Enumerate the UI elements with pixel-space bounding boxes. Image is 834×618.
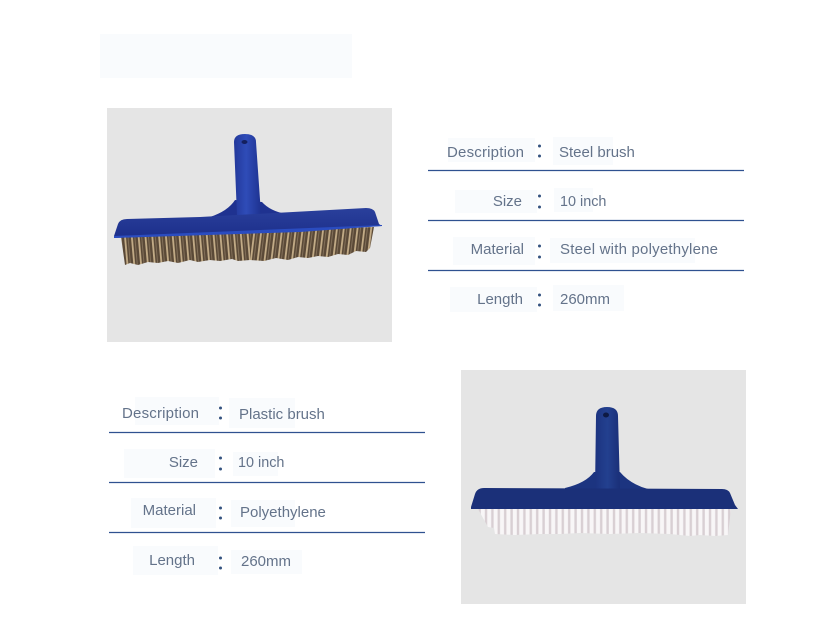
icon: plastic brush handle — [595, 407, 620, 491]
row: plastic size: 10 inch — [238, 455, 284, 471]
row: steel description: Description — [447, 144, 524, 161]
icon: steel bristles — [121, 227, 374, 265]
row: steel size: Size — [493, 193, 522, 210]
table: steel brush specs — [428, 137, 744, 312]
row: steel length — [450, 285, 624, 312]
icon: steel brush flanges — [210, 200, 286, 222]
row: steel size: 10 inch — [560, 194, 606, 210]
row: plastic length: Length — [149, 552, 195, 569]
panel: steel brush photo — [107, 108, 392, 342]
icon: plastic brush head — [471, 488, 738, 509]
row: plastic size: Size — [169, 454, 198, 471]
row: plastic material: Polyethylene — [240, 504, 326, 521]
icon: plastic brush flanges — [565, 472, 648, 492]
panel: plastic brush photo — [461, 370, 746, 604]
row: plastic length: 260mm — [241, 553, 291, 570]
blank header banner — [100, 34, 352, 78]
row: plastic material — [131, 498, 326, 528]
row: steel description — [447, 137, 635, 165]
icon: plastic bristles — [478, 509, 731, 536]
row: plastic material: Material — [143, 502, 196, 519]
row: plastic description: Plastic brush — [239, 406, 325, 423]
row: steel material — [453, 237, 718, 265]
table: plastic brush specs — [109, 397, 425, 575]
row: plastic description: Description — [122, 405, 199, 422]
row: steel material: Steel with polyethylene — [560, 241, 718, 258]
row: steel size — [455, 188, 606, 213]
row: steel material: Material — [471, 241, 524, 258]
icon: steel brush head — [114, 208, 382, 238]
row: plastic size — [124, 449, 284, 478]
row: steel description: Steel brush — [559, 144, 635, 161]
icon: steel brush handle — [234, 134, 261, 217]
row: plastic length — [133, 546, 302, 575]
row: steel length: 260mm — [560, 291, 610, 308]
row: steel length: Length — [477, 291, 523, 308]
row: plastic description — [122, 397, 325, 428]
